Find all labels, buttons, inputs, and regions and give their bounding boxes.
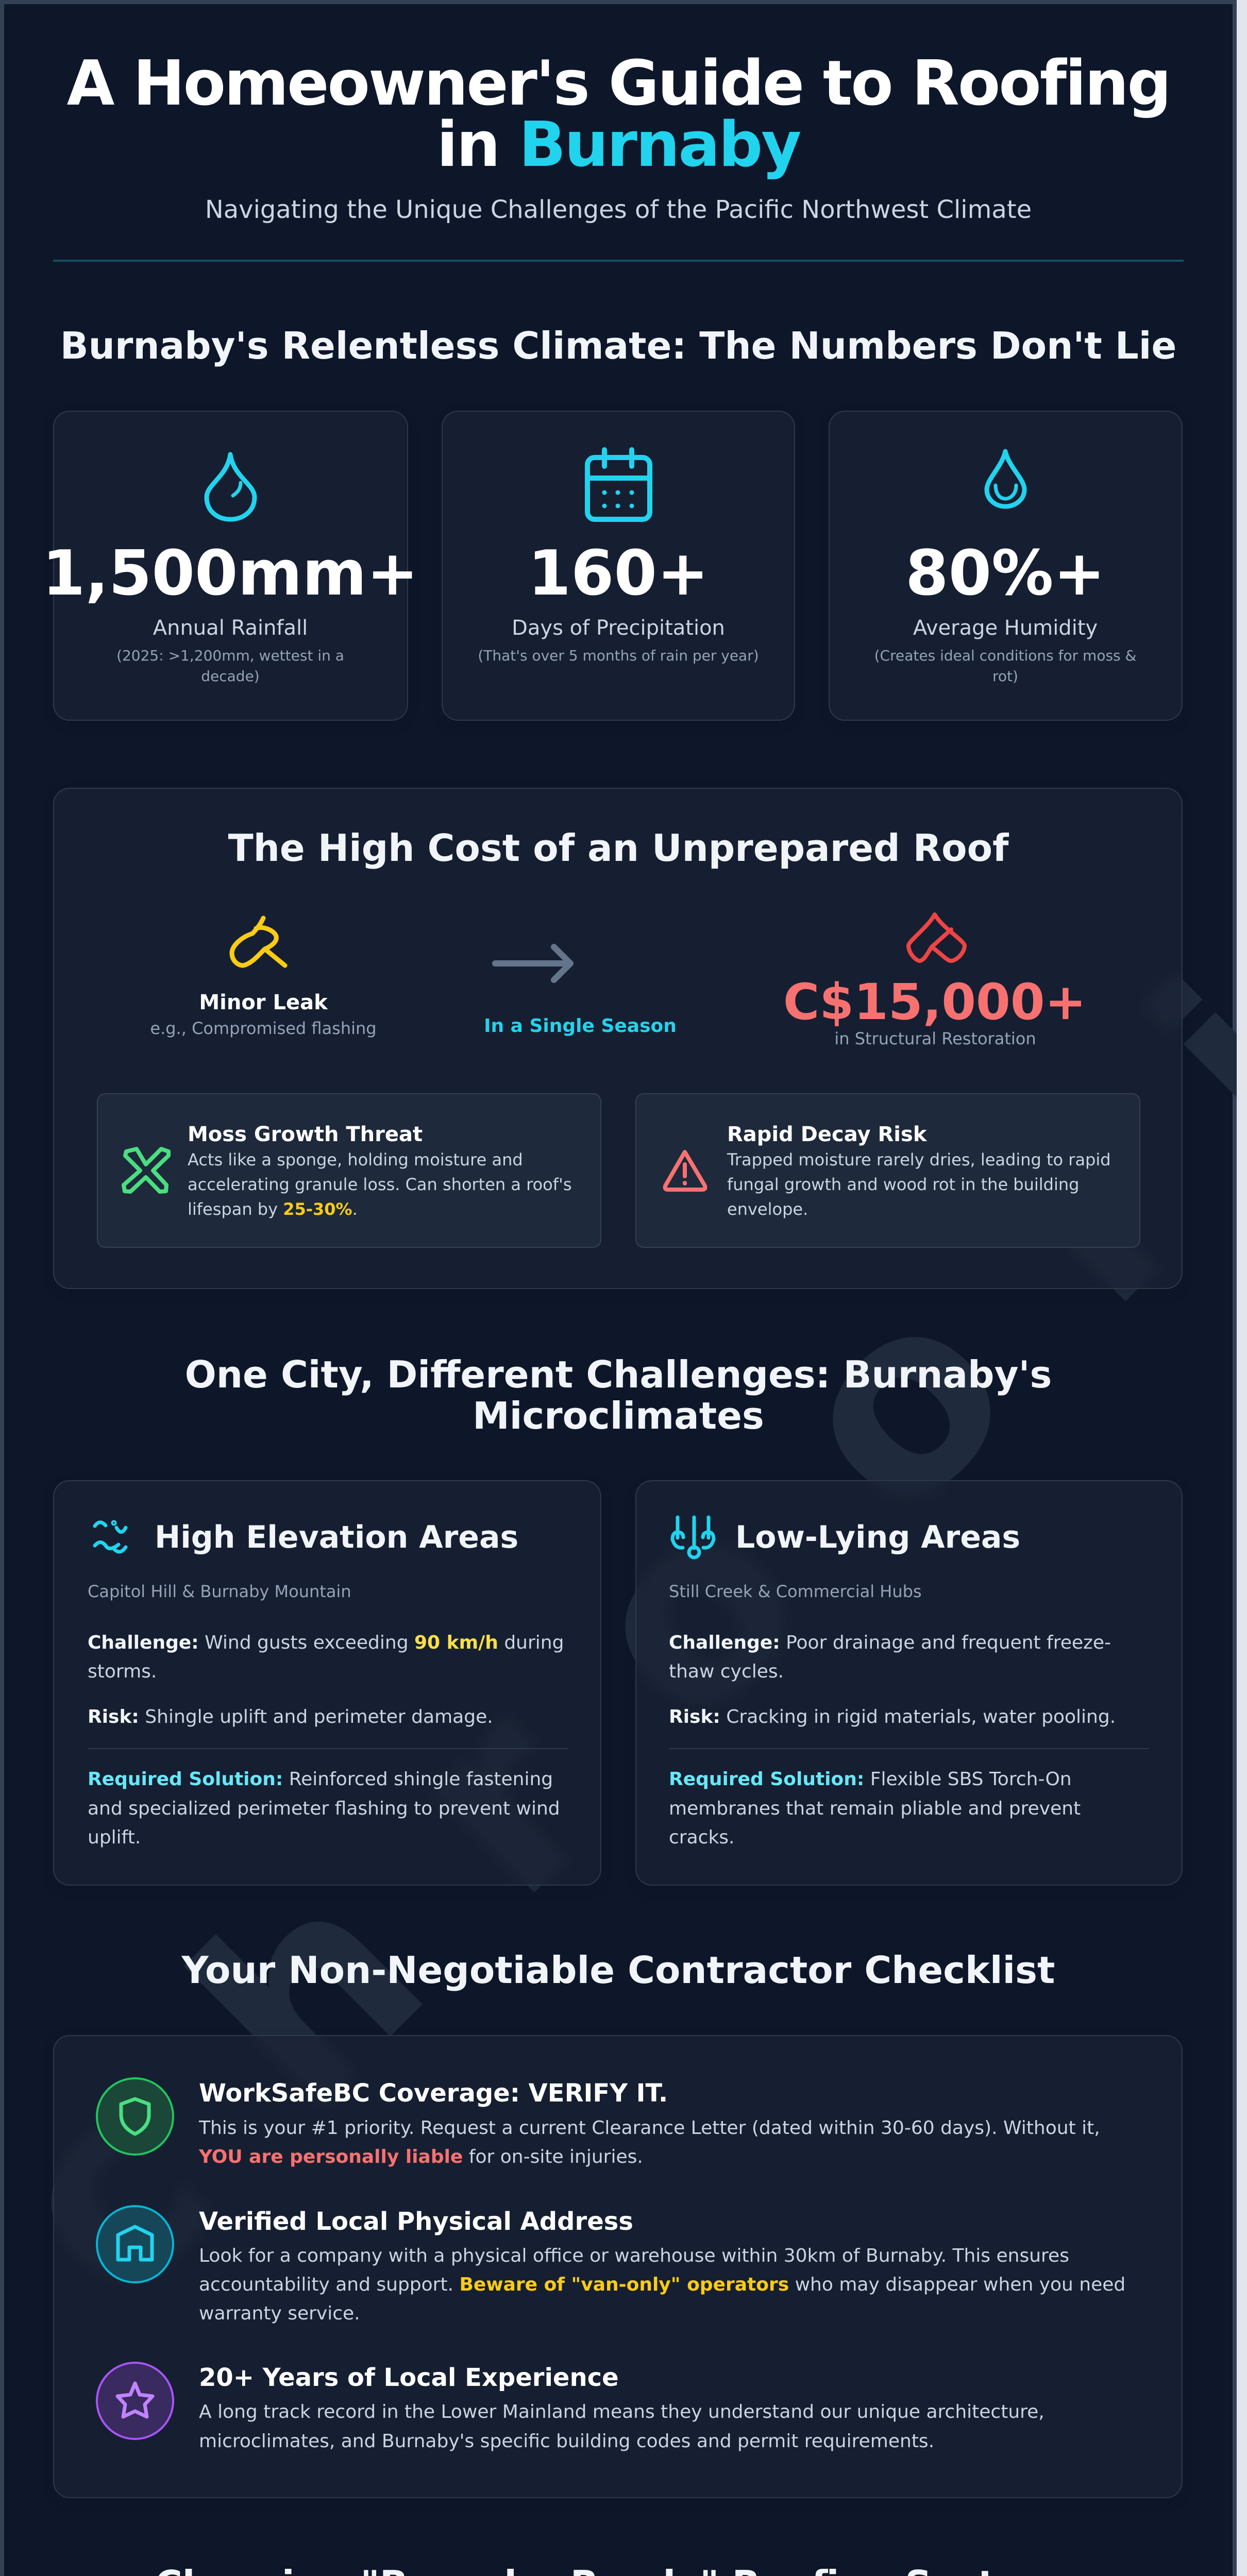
risk: Risk: Cracking in rigid materials, water pooling. [669, 1706, 1116, 1727]
required solution: membranes that remain pliable and prevent [669, 1798, 1081, 1819]
card title: Low-Lying Areas [735, 1519, 1020, 1555]
item body: Look for a company with a physical office or warehouse within 30km of Burnaby. This ensures [199, 2245, 1069, 2266]
panel: climate stat annual rainfall [53, 411, 408, 721]
minor leak label: Minor Leak [199, 991, 328, 1014]
item body: for on-site injuries. [463, 2146, 643, 2167]
heading: The High Cost of an Unprepared Roof [228, 826, 1009, 870]
sub-panel: rapid decay risk [635, 1093, 1140, 1248]
decay body: Trapped moisture rarely dries, leading to rapid [727, 1150, 1111, 1170]
panel: high elevation areas [53, 1480, 601, 1886]
icon: shield [97, 2078, 173, 2155]
stat value: 1,500mm+ [42, 538, 418, 609]
panel: low-lying areas [635, 1480, 1183, 1886]
challenge: Challenge: Wind gusts exceeding 90 km/h during [88, 1632, 564, 1653]
heading: microclimates: One City, Different Challenges: Burnaby's [185, 1353, 1052, 1396]
card title: High Elevation Areas [155, 1519, 518, 1555]
arrow caption: In a Single Season [484, 1015, 677, 1037]
item title: 20+ Years of Local Experience [199, 2363, 619, 2392]
risk: Risk: Shingle uplift and perimeter damage. [88, 1706, 493, 1727]
stat note: (Creates ideal conditions for moss & [874, 647, 1136, 664]
arrow [495, 947, 570, 980]
icon: calendar [587, 450, 650, 519]
item body: A long track record in the Lower Mainland means they understand our unique architecture, [199, 2401, 1044, 2422]
icon: rain drop [207, 454, 255, 519]
stat label: Days of Precipitation [512, 616, 725, 640]
stat note: (2025: >1,200mm, wettest in a [116, 647, 344, 664]
checklist item: worksafebc [97, 2078, 1100, 2167]
moss body: lifespan by [188, 1199, 283, 1219]
icon: wind [95, 1522, 126, 1552]
sub-panel: moss growth threat [97, 1093, 601, 1248]
panel: climate stat days of precipitation [442, 411, 795, 721]
icon: minor leak [232, 918, 285, 965]
item body: Beware of "van-only" operators who may disappear when you need [459, 2274, 1125, 2295]
icon: structural damage [908, 914, 965, 961]
required solution: cracks. [669, 1827, 735, 1848]
item body: This is your #1 priority. Request a current Clearance Letter (dated within 30-60 days). Without it, [199, 2117, 1100, 2139]
restoration cost: C$15,000+ [783, 973, 1086, 1031]
stat note: decade) [201, 668, 260, 685]
item body: warranty service. [199, 2303, 360, 2324]
stat value: 80%+ [905, 538, 1105, 609]
required solution: and specialized perimeter flashing to prevent wind [88, 1798, 560, 1819]
icon: alert triangle [665, 1152, 705, 1190]
item title: Verified Local Physical Address [199, 2207, 633, 2236]
title: in [437, 109, 519, 181]
item body: microclimates, and Burnaby's specific building codes and permit requirements. [199, 2431, 934, 2452]
required solution: Required Solution: Reinforced shingle fastening [88, 1769, 553, 1790]
icon: drainage [672, 1517, 714, 1557]
required solution: Required Solution: Flexible SBS Torch-On [669, 1769, 1072, 1790]
required solution: uplift. [88, 1827, 141, 1848]
subtitle: Navigating the Unique Challenges of the Pacific Northwest Climate [205, 195, 1032, 224]
panel: high cost of an unprepared roof [53, 788, 1183, 1289]
heading: climate: Burnaby's Relentless Climate: The Numbers Don't Lie [60, 324, 1176, 367]
challenge: Challenge: Poor drainage and frequent freeze- [669, 1632, 1111, 1653]
checklist item: physical address [97, 2206, 1125, 2324]
panel: climate stat average humidity [829, 411, 1183, 721]
challenge: thaw cycles. [669, 1661, 784, 1682]
decay body: envelope. [727, 1199, 808, 1219]
location note: Capitol Hill & Burnaby Mountain [88, 1582, 351, 1601]
title: A Homeowner's Guide to Roofing [67, 48, 1170, 120]
restoration note: in Structural Restoration [834, 1029, 1036, 1048]
stat label: Average Humidity [913, 616, 1098, 640]
title: Burnaby [519, 109, 801, 181]
decay title: Rapid Decay Risk [727, 1123, 928, 1146]
panel: contractor checklist [53, 2035, 1183, 2498]
moss body: accelerating granule loss. Can shorten a roof's [188, 1175, 571, 1194]
moss body: Acts like a sponge, holding moisture and [188, 1150, 523, 1170]
decay body: fungal growth and wood rot in the building [727, 1175, 1079, 1194]
icon: moss x [124, 1149, 168, 1192]
location note: Still Creek & Commercial Hubs [669, 1582, 922, 1601]
moss title: Moss Growth Threat [188, 1123, 423, 1146]
stat note: (That's over 5 months of rain per year) [478, 647, 759, 664]
heading: checklist: Your Non-Negotiable Contractor Checklist [181, 1948, 1055, 1992]
icon: star [97, 2363, 173, 2439]
item title: WorkSafeBC Coverage: VERIFY IT. [199, 2079, 668, 2108]
moss body: 25-30%. [283, 1199, 358, 1219]
icon: house [97, 2206, 173, 2282]
stat value: 160+ [528, 538, 709, 609]
icon: humidity drop [987, 451, 1024, 506]
stat label: Annual Rainfall [153, 616, 308, 640]
minor leak note: e.g., Compromised flashing [150, 1019, 377, 1038]
checklist item: local experience [97, 2363, 1044, 2452]
challenge: storms. [88, 1661, 157, 1682]
item body: accountability and support. [199, 2274, 459, 2295]
stat note: rot) [992, 668, 1018, 685]
heading: microclimates: Microclimates [473, 1394, 764, 1437]
item body: YOU are personally liable [198, 2146, 463, 2167]
